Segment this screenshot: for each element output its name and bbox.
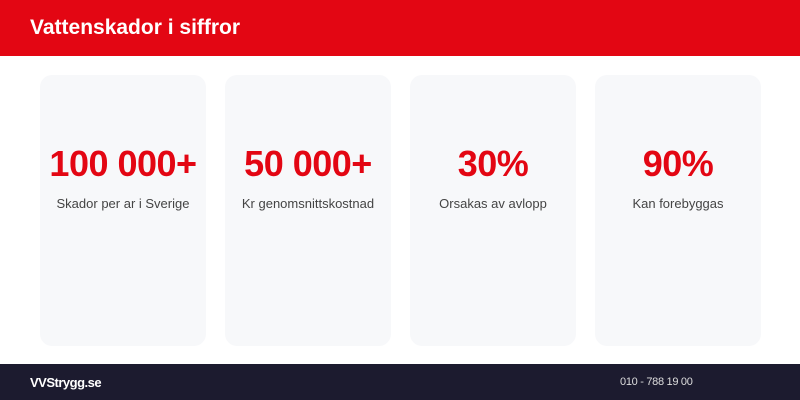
panel: stat 3: 30% xyxy=(458,143,528,184)
panel: stat 2: Kr genomsnittskostnad xyxy=(242,196,374,211)
panel: stat 2 xyxy=(225,75,391,346)
panel: stat 1: 100 000+ xyxy=(49,143,197,184)
footer: 010 - 788 19 00 xyxy=(620,376,693,388)
panel: stat 3: Orsakas av avlopp xyxy=(439,196,547,211)
panel: stat 4 xyxy=(595,75,761,346)
panel: stat 4: 90% xyxy=(643,143,713,184)
header xyxy=(0,0,800,56)
footer xyxy=(0,364,800,400)
panel: stat 3 xyxy=(410,75,576,346)
panel: stat 4: Kan forebyggas xyxy=(632,196,724,211)
panel: stat 1 xyxy=(40,75,206,346)
title: Vattenskador i siffror xyxy=(30,16,240,39)
panel: stat 1: Skador per ar i Sverige xyxy=(57,196,189,211)
footer: VVStrygg.se xyxy=(30,375,101,390)
panel: stat 2: 50 000+ xyxy=(244,143,372,184)
